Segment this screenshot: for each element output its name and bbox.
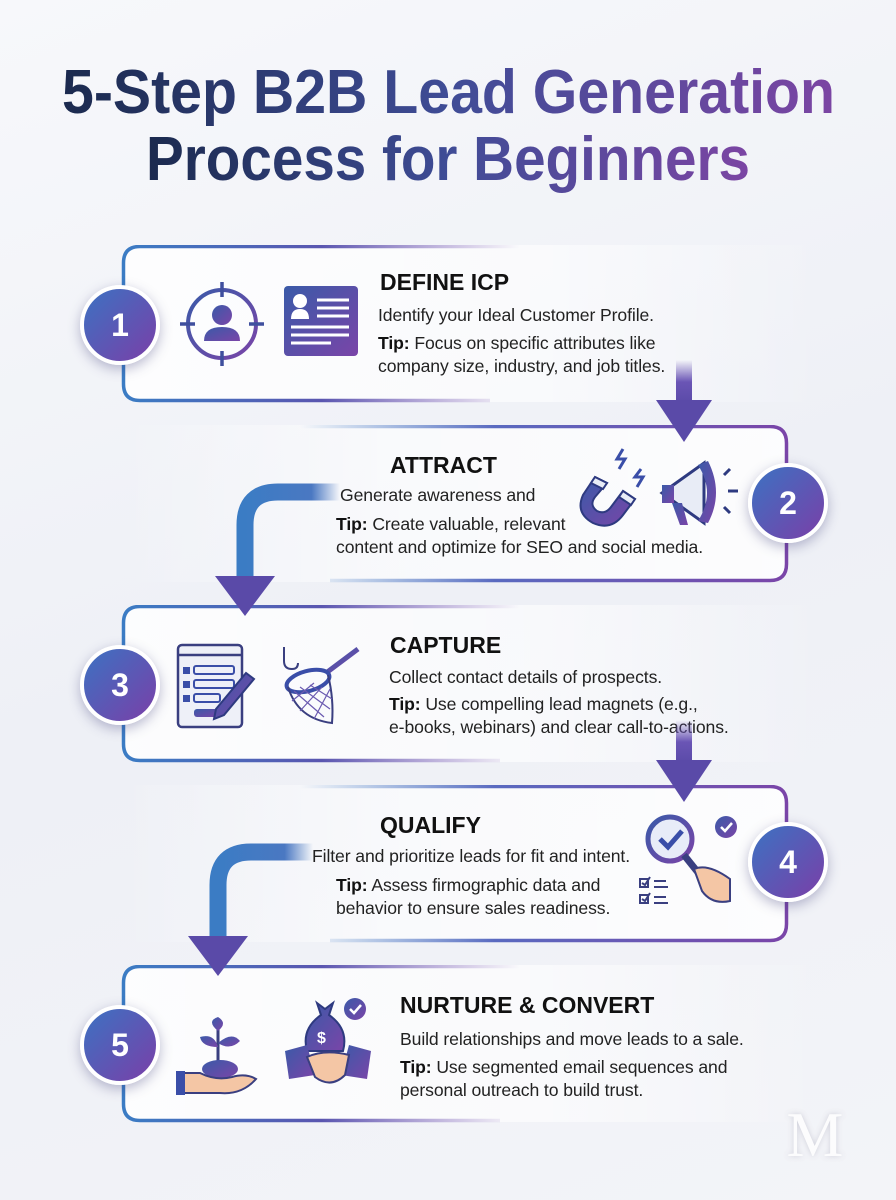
icon: plant in hand <box>176 1017 258 1095</box>
watermark logo: M <box>787 1099 843 1170</box>
heading: DEFINE ICP <box>380 269 509 295</box>
text block: Generate awareness and <box>340 485 535 505</box>
text block: company size, industry, and job titles. <box>378 356 665 376</box>
number badge 3 <box>80 645 160 725</box>
text block: Collect contact details of prospects. <box>389 667 662 687</box>
panel: step 1 define ICP <box>74 245 665 402</box>
icon: money bag and handshake <box>285 998 371 1084</box>
icon: megaphone <box>660 460 738 526</box>
arrow: step 3 to 4 <box>656 721 712 802</box>
heading: QUALIFY <box>380 812 481 838</box>
icon: target person <box>180 282 264 366</box>
icon: form with pen <box>176 644 256 728</box>
panel: step 2 attract: Tip: Create valuable, relevant <box>336 514 565 534</box>
title <box>62 58 835 194</box>
heading: ATTRACT <box>390 452 497 478</box>
title: Process for Beginners <box>146 125 750 194</box>
icon: net and hook <box>283 647 360 724</box>
number badge 1 <box>80 285 160 365</box>
panel: step 2 attract <box>315 425 834 582</box>
panel: step 4 qualify: Tip: Assess firmographic data and <box>336 875 600 895</box>
number badge 2: 2 <box>779 485 797 521</box>
panel: step 2 attract: content and optimize for SEO and social media. <box>336 537 703 557</box>
title: 5-Step B2B Lead Generation <box>62 58 835 127</box>
text block: Identify your Ideal Customer Profile. <box>378 305 654 325</box>
icon: magnet <box>580 448 646 527</box>
number badge 2 <box>748 463 828 543</box>
heading: NURTURE & CONVERT <box>400 992 654 1018</box>
text block: e-books, webinars) and clear call-to-actions. <box>389 717 729 737</box>
text block: Tip: Use segmented email sequences and <box>400 1057 727 1077</box>
text block <box>400 1029 744 1100</box>
number badge 1: 1 <box>111 307 129 343</box>
arrow: step 2 to 3 <box>215 484 338 616</box>
icon: money bag and handshake: $ <box>317 1030 326 1047</box>
text block: personal outreach to build trust. <box>400 1080 643 1100</box>
panel: step 4 qualify <box>312 785 834 942</box>
number badge 5 <box>80 1005 160 1085</box>
number badge 3: 3 <box>111 667 129 703</box>
number badge 4 <box>748 822 828 902</box>
arrow: step 4 to 5 <box>188 844 312 976</box>
text block <box>378 305 665 376</box>
icon: profile card <box>284 286 358 356</box>
panel: step 4 qualify: behavior to ensure sales readiness. <box>336 898 610 918</box>
panel: step 3 capture <box>74 605 729 762</box>
panel: step 5 nurture and convert <box>74 965 744 1122</box>
text block: Filter and prioritize leads for fit and intent. <box>312 846 630 866</box>
text block: Tip: Focus on specific attributes like <box>378 333 656 353</box>
text block <box>389 667 729 737</box>
arrow: step 1 to 2 <box>656 361 712 442</box>
icon: magnifier with checklist <box>639 814 737 904</box>
number badge 5: 5 <box>111 1027 129 1063</box>
text block: Tip: Use compelling lead magnets (e.g., <box>389 694 698 714</box>
number badge 4: 4 <box>779 844 797 880</box>
heading: CAPTURE <box>390 632 501 658</box>
text block: Build relationships and move leads to a sale. <box>400 1029 744 1049</box>
